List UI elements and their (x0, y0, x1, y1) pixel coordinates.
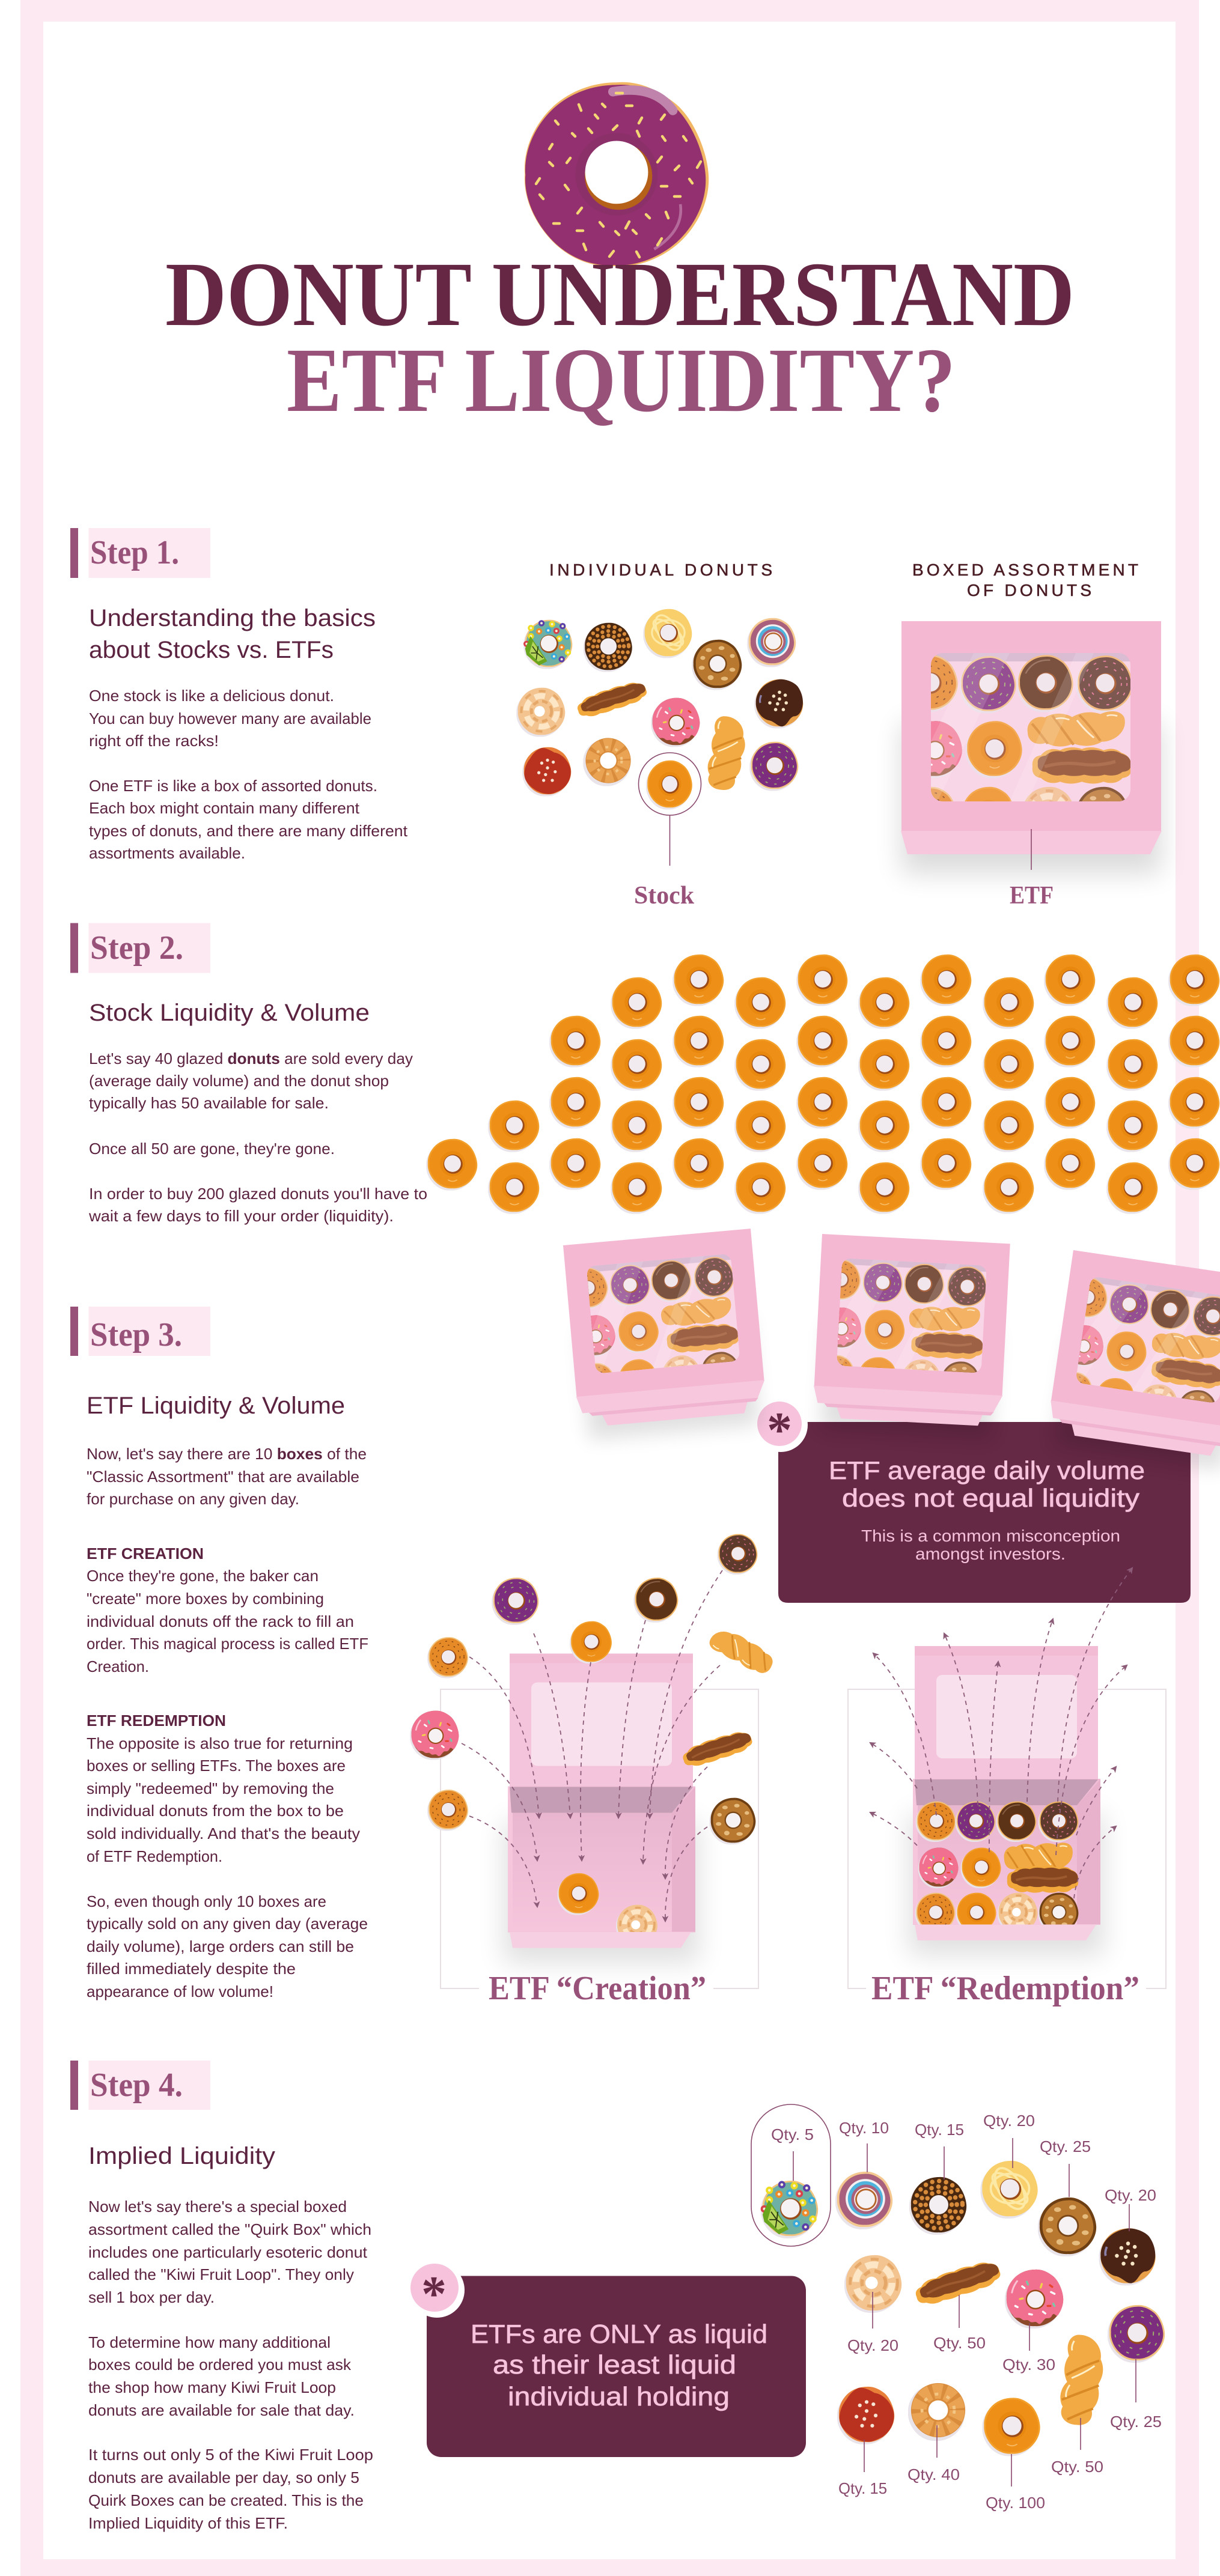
step 4 body text: Quirk Boxes can be created. This is the (88, 2491, 364, 2509)
redemption frame (848, 1689, 1166, 1988)
step 1 badge: Step 1. (90, 534, 179, 571)
step 4 body text: Now let's say there's a special boxed (88, 2198, 347, 2216)
step 3 conclusion text: typically sold on any given day (average (87, 1915, 368, 1933)
icon: donut box (901, 621, 1162, 873)
panel: individual donuts (516, 560, 803, 910)
step 1 badge (70, 528, 210, 578)
callout text (471, 2319, 767, 2411)
step 2 body text: (average daily volume) and the donut shop (89, 1072, 389, 1090)
step 2 body text: wait a few days to fill your order (liquidity). (88, 1207, 394, 1225)
arrows: donuts into box (462, 1570, 722, 1921)
etf redemption text: simply "redeemed" by removing the (87, 1779, 334, 1797)
step 3 intro text: Now, let's say there are 10 boxes of the (87, 1445, 367, 1463)
etf creation text: order. This magical process is called ETF (87, 1635, 368, 1653)
highlight pill: least liquid donut (751, 2104, 831, 2246)
qty: cruller 20: Qty. 20 (847, 2336, 898, 2354)
icon: asterisk badge (754, 1398, 808, 1458)
qty: glazed 100: Qty. 100 (986, 2494, 1045, 2512)
callout text: amongst investors. (915, 1545, 1066, 1563)
etf creation text: individual donuts off the rack to fill an (87, 1612, 354, 1630)
step 4 body text: assortment called the "Quirk Box" which (88, 2220, 371, 2238)
etf redemption text (87, 1712, 360, 1865)
qty: red 15 (837, 2387, 894, 2497)
callout: least liquid holding (409, 2262, 806, 2457)
step 3 intro text: for purchase on any given day. (87, 1490, 299, 1508)
qty: french cruller 40: Qty. 40 (907, 2465, 960, 2483)
title: DONUT UNDERSTAND (165, 244, 1075, 345)
qty: cruller 20 (844, 2255, 901, 2354)
step 2 badge: Step 2. (90, 929, 183, 967)
step 1 body text: types of donuts, and there are many different (89, 822, 408, 840)
step 1 body text: You can buy however many are available (89, 709, 371, 728)
step 1 body text: One ETF is like a box of assorted donuts. (89, 777, 377, 795)
callout text: as their least liquid (493, 2350, 736, 2380)
panel: step 1 text (70, 528, 408, 862)
label: etf creation: ETF “Creation” (489, 1970, 706, 2007)
donut scatter (516, 609, 803, 810)
qty: glazed 100 (982, 2398, 1045, 2512)
qty: nut 25 (1038, 2137, 1096, 2256)
qty: dark chocolate 20 (1099, 2186, 1156, 2285)
etf creation text (87, 1545, 368, 1675)
step 3 conclusion text: So, even though only 10 boxes are (87, 1892, 326, 1910)
panel: boxed assortment (901, 560, 1162, 910)
callout text: ETF average daily volume (829, 1456, 1145, 1484)
etf creation text: "create" more boxes by combining (87, 1590, 324, 1608)
qty: swirl 10 (835, 2119, 892, 2229)
step 3 intro text (87, 1445, 367, 1508)
icon: asterisk badge: * (767, 1402, 792, 1458)
panel: donut quantities (751, 2104, 1165, 2512)
step 1 heading (89, 605, 376, 663)
step 4 body text: It turns out only 5 of the Kiwi Fruit Loop (88, 2446, 373, 2464)
step 1 heading: Understanding the basics (89, 605, 376, 631)
qty: purple 25: Qty. 25 (1110, 2413, 1162, 2431)
creation frame (441, 1689, 758, 1988)
qty: pink 30: Qty. 30 (1002, 2356, 1055, 2374)
icon: asterisk badge: * (421, 2266, 447, 2322)
heading: boxed assortment: OF DONUTS (967, 581, 1091, 600)
qty: swirl 10: Qty. 10 (839, 2119, 889, 2137)
step 3 conclusion text: filled immediately despite the (87, 1960, 296, 1978)
panel: step 3 text (70, 1307, 368, 2000)
heading: individual donuts: INDIVIDUAL DONUTS (549, 560, 772, 579)
step 4 body text (88, 2198, 373, 2532)
panel: etf creation (410, 1534, 778, 2007)
step 4 heading: Implied Liquidity (88, 2143, 275, 2169)
falling donuts (410, 1534, 778, 1844)
qty: twist 50: Qty. 50 (1051, 2458, 1103, 2476)
qty: waffle 15: Qty. 15 (915, 2121, 964, 2139)
etf redemption text: The opposite is also true for returning (87, 1734, 353, 1752)
callout: average daily volume (754, 1398, 1191, 1603)
step 1 body text: Each box might contain many different (89, 799, 360, 817)
step 1 body text: right off the racks! (89, 732, 219, 750)
open box: creation (504, 1653, 699, 1963)
step 4 body text: To determine how many additional (88, 2333, 331, 2351)
label: stock: Stock (634, 882, 695, 910)
step 1 heading: about Stocks vs. ETFs (89, 637, 334, 663)
etf creation text: Creation. (87, 1657, 149, 1675)
etf leader line (1031, 829, 1032, 870)
qty: eclair 50: Qty. 50 (933, 2334, 986, 2352)
etf redemption text: boxes or selling ETFs. The boxes are (87, 1757, 346, 1775)
step 4 body text: sell 1 box per day. (88, 2288, 215, 2306)
step 2 body text: In order to buy 200 glazed donuts you'll have to (89, 1185, 427, 1203)
label: etf: ETF (1010, 882, 1054, 910)
box front flap (915, 1925, 1096, 1940)
panel: step 2 text (70, 923, 427, 1225)
step 4 body text: the shop how many Kiwi Fruit Loop (88, 2378, 336, 2396)
label: etf redemption: ETF “Redemption” (871, 1970, 1139, 2007)
etf redemption text: ETF REDEMPTION (87, 1712, 226, 1730)
qty: dark chocolate 20: Qty. 20 (1105, 2186, 1156, 2204)
heading: boxed assortment: BOXED ASSORTMENT (912, 560, 1138, 579)
step 4 badge (70, 2061, 210, 2110)
title (165, 244, 1075, 431)
step 3 intro text: "Classic Assortment" that are available (87, 1468, 359, 1486)
step 3 conclusion text: daily volume), large orders can still be (87, 1937, 354, 1955)
step 2 heading: Stock Liquidity & Volume (89, 1000, 370, 1026)
qty: french cruller 40 (907, 2383, 965, 2483)
panel: etf redemption (848, 1568, 1166, 2007)
qty: eclair 50 (912, 2257, 1003, 2352)
etf redemption text: of ETF Redemption. (87, 1847, 222, 1865)
step 3 badge (70, 1307, 210, 1356)
title: ETF LIQUIDITY? (287, 330, 956, 431)
etf redemption text: sold individually. And that's the beauty (87, 1824, 360, 1842)
step 4 body text: boxes could be ordered you must ask (88, 2356, 352, 2374)
qty: nut 25: Qty. 25 (1040, 2137, 1091, 2155)
qty: kiwi 5: Qty. 5 (771, 2125, 814, 2143)
glazed donut field (426, 955, 1219, 1214)
step 2 body text (88, 1050, 427, 1225)
step 1 body text (89, 687, 408, 862)
qty: yellow 20 (981, 2112, 1038, 2219)
step 3 conclusion text (87, 1892, 368, 2000)
open box: redemption (909, 1646, 1104, 1955)
step 4 badge: Step 4. (90, 2067, 183, 2104)
step 4 body text: donuts are available for sale that day. (88, 2401, 355, 2419)
step 2 body text: typically has 50 available for sale. (89, 1094, 329, 1112)
step 3 conclusion text: appearance of low volume! (87, 1982, 273, 2000)
heading: boxed assortment (912, 560, 1138, 600)
arrows: donuts out of box (870, 1568, 1132, 1898)
step 4 body text: donuts are available per day, so only 5 (88, 2468, 359, 2486)
donuts in box (558, 1873, 657, 1946)
qty: twist 50 (1051, 2334, 1105, 2476)
step 3 heading: ETF Liquidity & Volume (87, 1393, 345, 1419)
step 1 body text: assortments available. (89, 844, 245, 862)
step 2 body text: Let's say 40 glazed donuts are sold every day (89, 1050, 413, 1068)
etf redemption text: individual donuts from the box to be (87, 1802, 344, 1820)
panel: step 4 text (70, 2061, 373, 2532)
stacked donut boxes (563, 1229, 1220, 1472)
step 1 body text: One stock is like a delicious donut. (89, 687, 334, 705)
icon: hero purple donut (525, 82, 709, 266)
step 4 body text: includes one particularly esoteric donut (88, 2243, 368, 2261)
callout text: ETFs are ONLY as liquid (471, 2319, 767, 2349)
callout text: This is a common misconception (861, 1526, 1120, 1545)
step 2 body text: Once all 50 are gone, they're gone. (89, 1140, 335, 1158)
icon: asterisk badge (409, 2262, 465, 2322)
qty: pink 30 (1002, 2270, 1063, 2374)
qty: purple 25 (1108, 2305, 1165, 2431)
callout text (829, 1456, 1145, 1563)
qty: kiwi 5 (761, 2125, 818, 2238)
step 4 body text: Implied Liquidity of this ETF. (88, 2514, 288, 2532)
step 4 body text: called the "Kiwi Fruit Loop". They only (88, 2265, 354, 2283)
stock callout ring and leader (638, 753, 701, 866)
step 2 badge (70, 923, 210, 973)
donuts in box (915, 1802, 1078, 1933)
callout text: individual holding (508, 2382, 730, 2411)
box front flap (510, 1932, 691, 1948)
qty: waffle 15 (909, 2121, 966, 2235)
etf creation text: Once they're gone, the baker can (87, 1567, 319, 1585)
etf creation text: ETF CREATION (87, 1545, 204, 1563)
step 3 badge: Step 3. (90, 1316, 182, 1353)
qty: red 15: Qty. 15 (838, 2479, 887, 2497)
callout text: does not equal liquidity (842, 1484, 1139, 1512)
qty: yellow 20: Qty. 20 (983, 2112, 1035, 2130)
